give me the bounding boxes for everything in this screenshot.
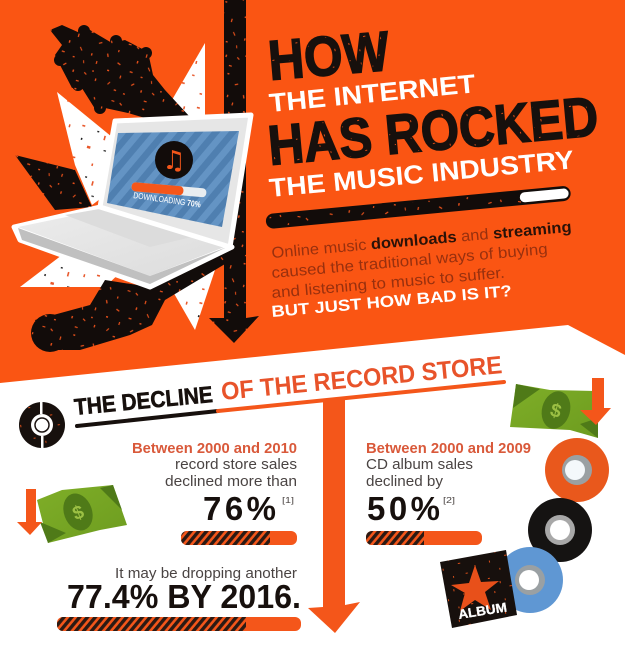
section heading xyxy=(73,351,503,420)
music icon: ♫ xyxy=(162,146,186,176)
intro line 3: and listening to music to suffer. xyxy=(271,265,505,302)
icon: orange arrow left xyxy=(17,489,42,535)
intro line 1: Online music downloads and streaming xyxy=(271,219,572,262)
stat: CD album sales xyxy=(366,441,531,545)
laptop screen xyxy=(107,131,239,227)
stat text line 2: declined more than xyxy=(165,474,297,490)
title line: THE INTERNET: THE INTERNET xyxy=(268,68,477,118)
citation 2: [2] xyxy=(443,496,455,505)
laptop lid xyxy=(100,115,251,247)
title line: THE MUSIC INDUSTRY: THE MUSIC INDUSTRY xyxy=(268,144,575,203)
stat text line 2: declined by xyxy=(366,474,444,490)
black starburst spike xyxy=(15,155,92,210)
stat: record store sales xyxy=(132,441,297,545)
guitar body and pegs xyxy=(31,250,235,352)
progress bar 76% xyxy=(181,531,297,545)
stat text line 1: record store sales xyxy=(175,457,297,473)
title xyxy=(265,19,601,203)
heading: the decline: THE DECLINE xyxy=(73,381,214,420)
orange down arrow xyxy=(308,398,360,633)
download progress bar xyxy=(131,182,207,198)
icon: falling dollar bill left: $ xyxy=(70,502,87,525)
projection value: 77.4% BY 2016. xyxy=(67,578,301,615)
laptop front edge xyxy=(18,228,227,284)
intro line 4: BUT JUST HOW BAD IS IT? xyxy=(271,283,512,321)
guitar headstock xyxy=(50,25,190,118)
icon: black CD xyxy=(528,498,592,562)
laptop base xyxy=(14,207,232,287)
icon: falling dollar bill right: $ xyxy=(548,400,564,423)
projection text: It may be dropping another xyxy=(115,566,297,582)
downloading label: DOWNLOADING 70% xyxy=(133,190,202,209)
stat: 2016 projection xyxy=(57,566,301,631)
section icon: record xyxy=(19,402,65,448)
stat heading: Between 2000 and 2010 xyxy=(132,441,297,457)
stat text line 1: CD album sales xyxy=(366,457,473,473)
heading underline xyxy=(77,382,504,426)
icon: orange arrow right xyxy=(580,378,611,425)
icon: falling dollar bill right xyxy=(510,378,611,438)
icon: blue CD xyxy=(497,547,563,613)
citation 1: [1] xyxy=(282,496,294,505)
black down arrow xyxy=(209,0,259,343)
progress bar 50% xyxy=(366,531,482,545)
icon: falling dollar bill left xyxy=(17,485,127,543)
stat value 76%: 76% xyxy=(203,490,276,527)
laptop keyboard xyxy=(65,208,200,247)
white starburst xyxy=(20,43,215,330)
laptop base surface xyxy=(18,210,227,276)
laptop xyxy=(14,115,251,287)
heading: of the record store: OF THE RECORD STORE xyxy=(220,351,503,406)
intro text xyxy=(271,219,572,321)
title progress bar xyxy=(265,185,571,229)
icon: album cover xyxy=(440,550,517,628)
icon: album cover: ALBUM xyxy=(457,599,508,622)
stat heading: Between 2000 and 2009 xyxy=(366,441,531,457)
title line: HOW: HOW xyxy=(266,19,392,92)
icon: orange CD xyxy=(545,438,609,502)
progress bar 77.4% xyxy=(57,617,301,631)
stat value 50%: 50% xyxy=(367,490,440,527)
music icon xyxy=(155,141,193,179)
intro line 2: caused the traditional ways of buying xyxy=(271,241,548,282)
